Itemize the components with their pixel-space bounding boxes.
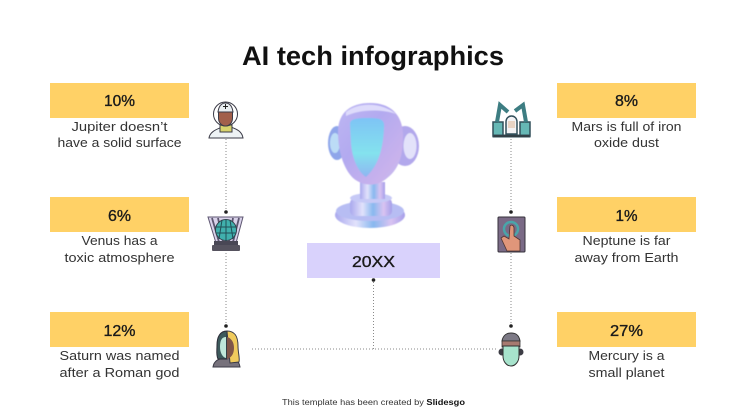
- connector: center box to bottom icons: [252, 278, 498, 349]
- panel: 1% Neptune: away from Earth: [574, 250, 678, 265]
- connector: right top to right middle: [509, 139, 513, 214]
- panel: 12% Saturn: Saturn was named: [60, 348, 180, 363]
- icon: medic robot: [209, 102, 243, 138]
- footer credit: This template has been created by Slidesgo: [282, 397, 465, 407]
- connector: left middle to left bottom: [224, 253, 228, 328]
- panel: 6% Venus: Venus has a: [82, 233, 158, 248]
- panel: 10% Jupiter: [50, 83, 189, 150]
- illustration: iridescent robot head: [328, 103, 419, 228]
- icon: touch screen hand: [498, 217, 525, 252]
- panel: 27% Mercury: Mercury is a: [588, 348, 665, 363]
- box: 20XX: 20XX: [352, 254, 395, 271]
- connector: right middle to right bottom: [509, 253, 513, 328]
- box: 20XX: [307, 243, 440, 278]
- icon: robot arms: [493, 105, 530, 137]
- icon: half android half woman: [213, 331, 240, 367]
- connector: left top to left middle: [224, 139, 228, 214]
- panel: 27% Mercury: small planet: [588, 365, 665, 380]
- panel: 6% Venus: 6%: [108, 208, 131, 225]
- panel: 1% Neptune: Neptune is far: [582, 233, 671, 248]
- panel: 12% Saturn: after a Roman god: [60, 365, 180, 380]
- panel: 8% Mars: 8%: [615, 93, 638, 110]
- panel: 10% Jupiter: have a solid surface: [58, 135, 182, 150]
- panel: 1% Neptune: 1%: [616, 208, 638, 225]
- panel: 27% Mercury: [557, 312, 696, 380]
- icon: android head: [498, 333, 524, 366]
- panel: 27% Mercury: 27%: [610, 323, 643, 340]
- icon: hologram globe: [208, 217, 243, 251]
- panel: 10% Jupiter: Jupiter doesn’t: [72, 119, 168, 134]
- panel: 8% Mars: [557, 83, 696, 150]
- title: AI tech infographics: [242, 41, 504, 71]
- panel: 12% Saturn: [50, 312, 189, 380]
- panel: 8% Mars: Mars is full of iron: [572, 119, 682, 134]
- panel: 6% Venus: [50, 197, 189, 265]
- panel: 1% Neptune: [557, 197, 696, 265]
- panel: 12% Saturn: 12%: [104, 323, 136, 340]
- panel: 6% Venus: toxic atmosphere: [64, 250, 174, 265]
- panel: 10% Jupiter: 10%: [104, 93, 135, 110]
- panel: 8% Mars: oxide dust: [594, 135, 659, 150]
